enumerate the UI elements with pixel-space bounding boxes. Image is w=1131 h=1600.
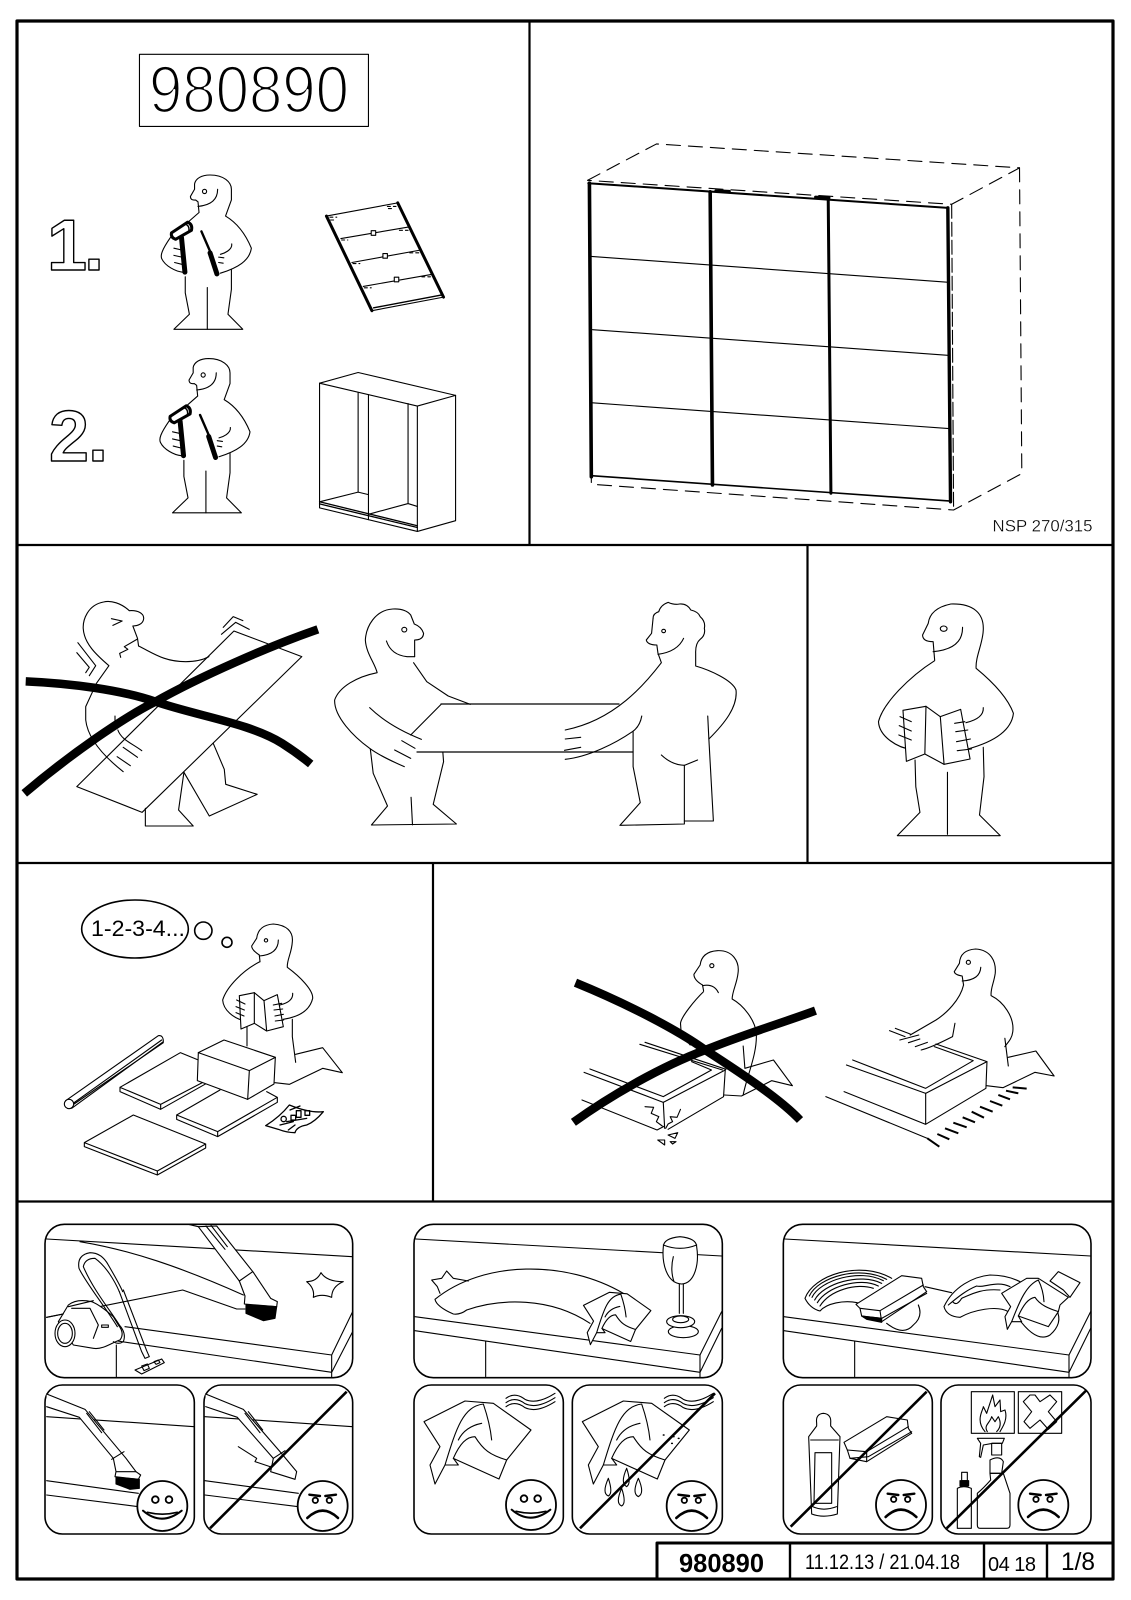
rolled tube [64,1036,163,1109]
step number 2: 2. [49,397,108,477]
small panel: brush attachment, wrong [204,1385,353,1534]
large rounded panel: vacuum on table [45,1224,353,1378]
kneeling person with manual [223,924,342,1084]
thick cross: wrong way [573,983,815,1122]
person with hammer and screwdriver 2 [160,359,250,513]
smiley face [137,1481,187,1531]
spray bottles [957,1438,1010,1528]
door frame drawing [326,203,444,311]
sad face [876,1480,926,1530]
small panel: damp cloth, correct [414,1385,563,1534]
sad face [667,1481,717,1531]
bag of fittings [266,1105,323,1133]
wardrobe carcass [320,372,456,531]
small panel: brush attachment, correct [45,1385,194,1534]
sliding wardrobe drawing [587,144,1022,510]
panel: person reading instructions [878,604,1013,836]
hazard pictogram: flame [971,1392,1014,1433]
small panel: abrasive sponge and cleaner, wrong [783,1385,932,1534]
article number: 980890 [679,1548,764,1578]
person setting box on rug [826,949,1054,1138]
panel: cleaning instructions, vacuum [45,1224,353,1534]
panel: protect the floor [573,949,1054,1145]
large rounded panel: wiping with cloth [414,1224,722,1378]
page number: 1/8 [1061,1548,1095,1576]
panel: count the parts [64,900,342,1175]
smiley face [506,1480,556,1530]
thought bubble [82,900,232,958]
panel: do not carry alone, carry with two people [24,601,470,826]
thought bubble: 1-2-3-4... [91,916,185,941]
thick cross: wrong way [24,629,318,793]
person struggling alone [77,601,302,826]
hazard pictogram: cross [1018,1392,1062,1433]
person with hammer and screwdriver 1 [161,175,251,329]
panel: product overview [587,144,1093,535]
article number box: 980890 [149,52,349,127]
sad face [298,1481,348,1531]
model label: NSP 270/315 [993,516,1093,535]
revision dates: 11.12.13 / 21.04.18 [805,1551,960,1574]
vacuum cleaner [47,1253,164,1374]
title block [657,1543,1113,1579]
large rounded panel: scouring sponge and cloth [783,1224,1091,1378]
person carrying board, right [565,602,736,825]
rug fringe [927,1087,1027,1147]
small panel: wet cloth, wrong [572,1385,722,1534]
person carrying board, left [335,609,470,825]
small panel: flammable and corrosive sprays, wrong [941,1385,1091,1534]
print date: 04 18 [988,1554,1036,1576]
person dropping box on bare floor [582,951,792,1145]
step number 1: 1. [47,206,104,286]
panel: cleaning instructions, sponge and chemicals [783,1224,1091,1534]
panel dividers [17,21,1113,1202]
board carried by two people [417,704,633,752]
panel: cleaning instructions, damp cloth [414,1224,722,1534]
panel: tools required [47,52,456,531]
sad face [1018,1480,1068,1530]
panels and box of parts [84,1040,277,1175]
